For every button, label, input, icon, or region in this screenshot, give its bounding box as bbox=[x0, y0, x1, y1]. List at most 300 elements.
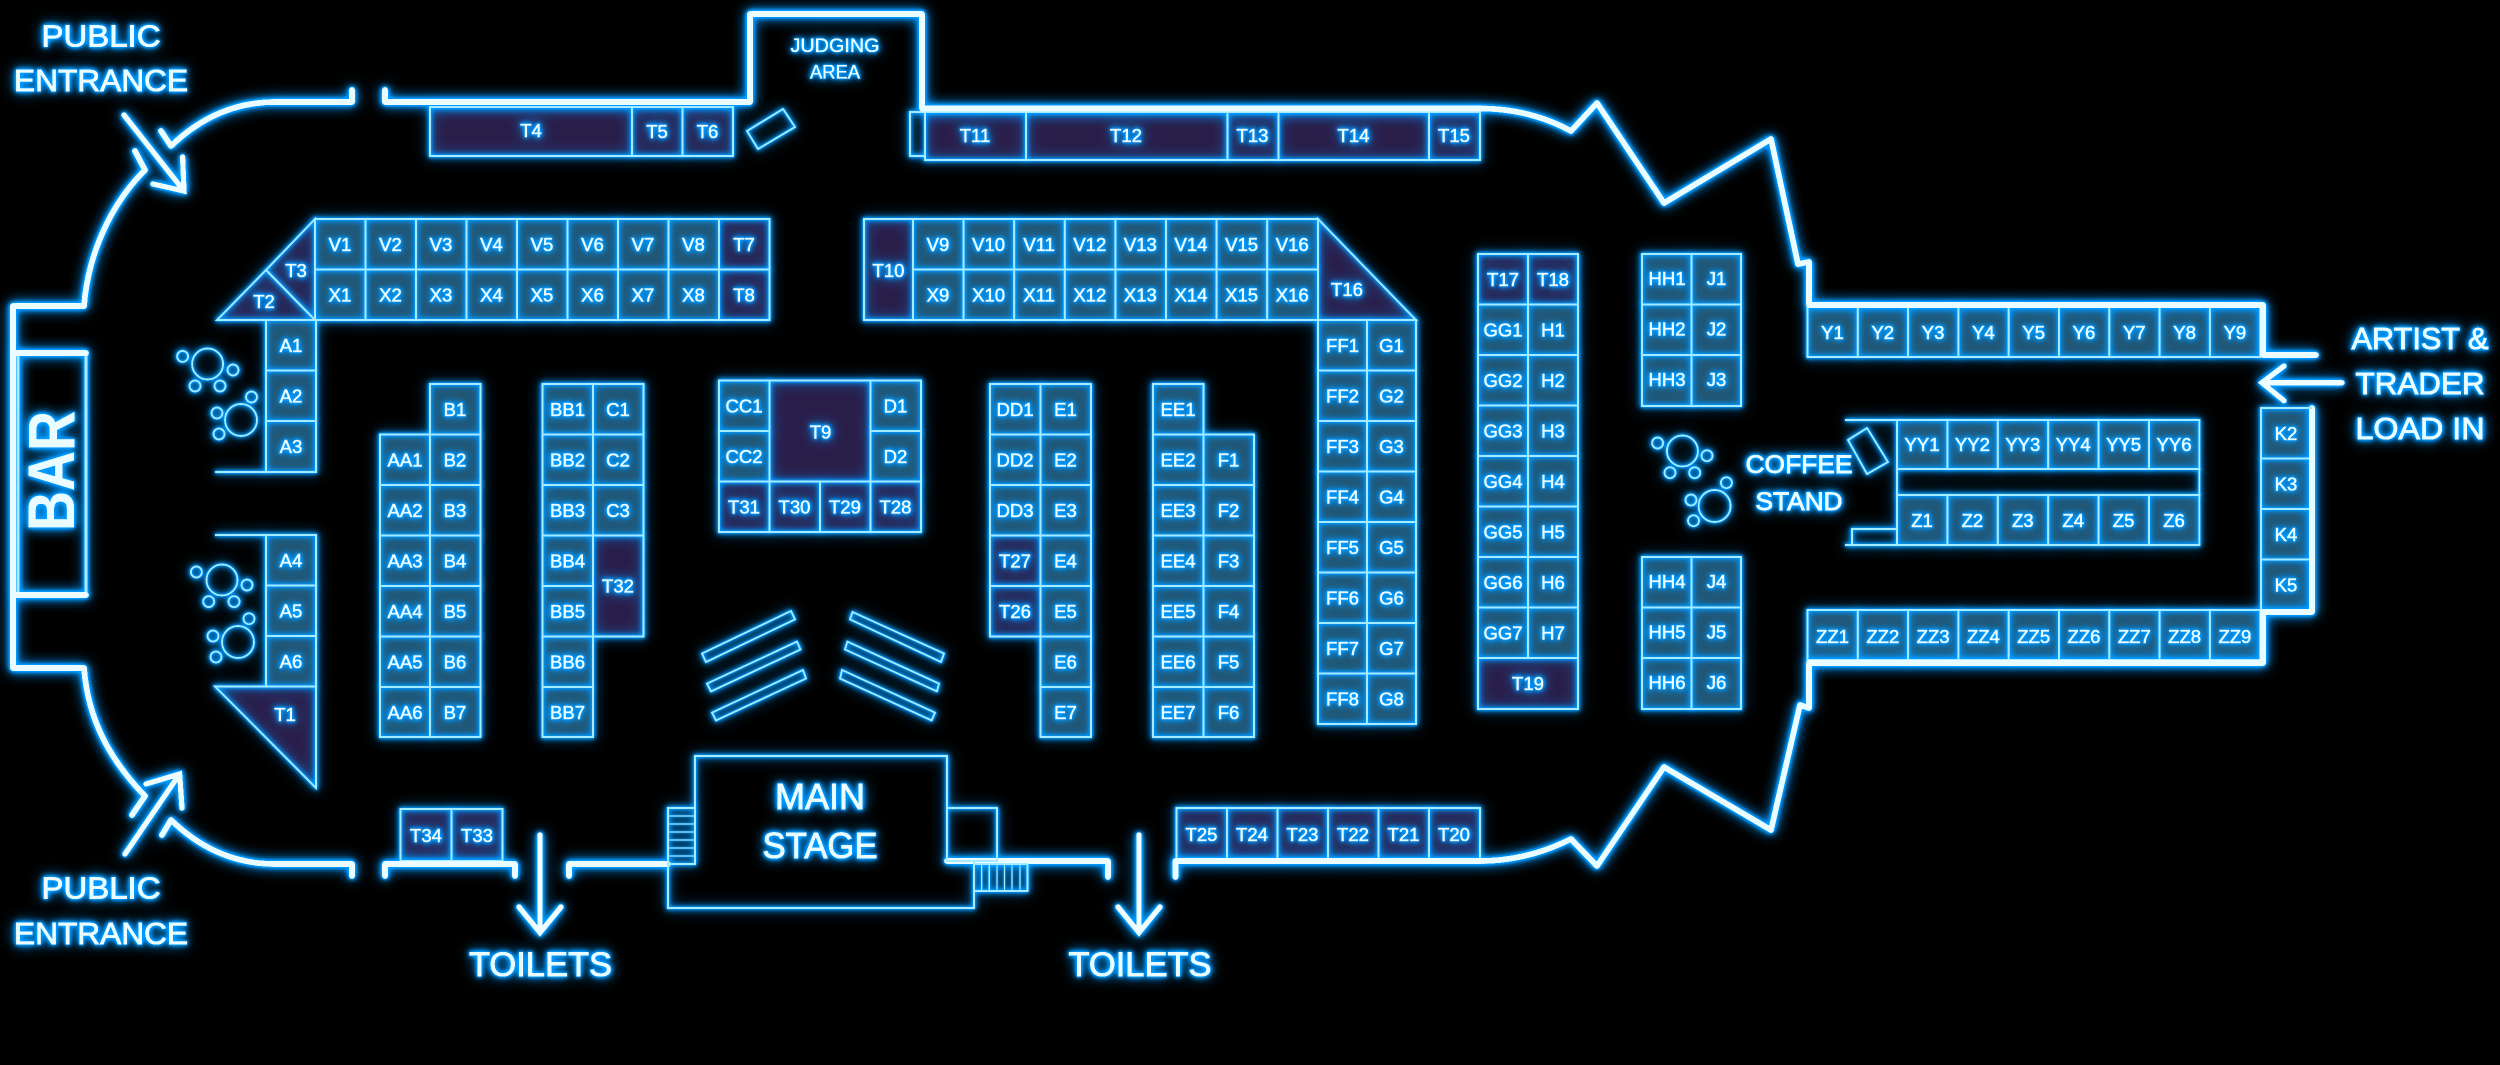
stall T30: T30 bbox=[779, 496, 810, 518]
stall CC1 bbox=[719, 380, 770, 431]
stall X1 bbox=[315, 270, 366, 320]
stall T10: T10 bbox=[873, 260, 904, 281]
stall X12: X12 bbox=[1073, 284, 1106, 306]
heading: coffee stand bbox=[1746, 451, 1852, 516]
stall X4: X4 bbox=[480, 284, 503, 306]
stall V1: V1 bbox=[329, 234, 351, 255]
stall K5: K5 bbox=[2275, 574, 2297, 596]
stall G2: G2 bbox=[1379, 386, 1404, 406]
stall X16 bbox=[1267, 270, 1318, 320]
stall E3 bbox=[1040, 485, 1091, 536]
stall BB4: BB4 bbox=[550, 550, 585, 572]
stall F1: F1 bbox=[1218, 450, 1239, 470]
stall B2 bbox=[430, 434, 480, 485]
stall T31 bbox=[719, 482, 770, 532]
stall E5 bbox=[1040, 586, 1091, 636]
stall EE4: EE4 bbox=[1161, 550, 1195, 572]
stall V7: V7 bbox=[632, 234, 654, 255]
stall F3: F3 bbox=[1218, 550, 1239, 572]
stall V11 bbox=[1014, 219, 1065, 270]
stall Z5: Z5 bbox=[2113, 510, 2134, 531]
stall T12 bbox=[1026, 112, 1228, 160]
stall Z1: Z1 bbox=[1911, 510, 1933, 531]
stall X15: X15 bbox=[1225, 284, 1258, 306]
stall T11 bbox=[925, 112, 1026, 160]
stall X14 bbox=[1166, 270, 1217, 320]
stall ZZ5 bbox=[2009, 610, 2059, 660]
stall J4: J4 bbox=[1707, 571, 1726, 592]
stall Z4: Z4 bbox=[2062, 510, 2084, 531]
stall HH5 bbox=[1642, 608, 1692, 658]
stall Y6: Y6 bbox=[2073, 322, 2095, 343]
stall V16 bbox=[1267, 219, 1318, 270]
stall T31: T31 bbox=[728, 496, 760, 518]
stall Y4 bbox=[1958, 307, 2009, 357]
stall HH1: HH1 bbox=[1648, 268, 1686, 289]
stall T22: T22 bbox=[1337, 824, 1369, 845]
stall X9: X9 bbox=[927, 284, 949, 306]
top wall stalls T4 to T6 bbox=[430, 107, 733, 156]
stall FF2 bbox=[1318, 370, 1367, 421]
stall H4 bbox=[1528, 456, 1578, 506]
blocks HH and J upper bbox=[1642, 254, 1741, 406]
bottom stalls T34 and T33 bbox=[400, 809, 502, 861]
stall V4: V4 bbox=[480, 234, 503, 255]
stall HH2: HH2 bbox=[1648, 318, 1686, 340]
bar top edge bbox=[13, 350, 86, 356]
stall T22 bbox=[1328, 808, 1378, 861]
stall T4 bbox=[430, 107, 632, 156]
stall AA3 bbox=[380, 536, 430, 586]
stall BB6 bbox=[542, 636, 593, 687]
stall YY4 bbox=[2048, 420, 2099, 469]
wall: north side from entrance to judging area bbox=[385, 14, 2316, 355]
heading: judging area: AREA bbox=[810, 62, 860, 84]
stall V9: V9 bbox=[927, 234, 949, 255]
stall EE3: EE3 bbox=[1161, 500, 1195, 521]
stall B2: B2 bbox=[444, 450, 466, 470]
stall T32: T32 bbox=[602, 576, 634, 596]
stall T2: T2 bbox=[253, 291, 275, 312]
blocks FF and G bbox=[1318, 320, 1416, 724]
stall T16: T16 bbox=[1331, 279, 1363, 300]
stall B7: B7 bbox=[444, 702, 466, 723]
stall A2: A2 bbox=[280, 386, 302, 406]
stall V15: V15 bbox=[1225, 234, 1258, 255]
stall D1 bbox=[870, 380, 921, 431]
stall AA6: AA6 bbox=[388, 702, 422, 723]
stall T7: T7 bbox=[733, 234, 755, 255]
block V and X left bbox=[217, 219, 770, 320]
stall FF4 bbox=[1318, 472, 1367, 522]
stall B4: B4 bbox=[444, 550, 466, 572]
bar label: BAR bbox=[14, 411, 88, 531]
stall X3: X3 bbox=[430, 284, 452, 306]
stall T28: T28 bbox=[880, 496, 911, 518]
stall T21: T21 bbox=[1388, 824, 1419, 845]
stall C2 bbox=[593, 434, 644, 485]
stall V8 bbox=[668, 219, 719, 270]
stall EE1 bbox=[1153, 384, 1204, 434]
stall A6: A6 bbox=[280, 651, 302, 672]
heading: coffee stand: COFFEE bbox=[1746, 451, 1852, 479]
heading: artist and trader load in: LOAD IN bbox=[2356, 411, 2484, 446]
stall YY5: YY5 bbox=[2106, 434, 2141, 455]
stall DD2: DD2 bbox=[996, 450, 1034, 470]
bar counter bbox=[18, 353, 86, 595]
stall J4 bbox=[1692, 557, 1741, 608]
seating icon 5 bbox=[1652, 436, 1712, 478]
stall H2 bbox=[1528, 355, 1578, 406]
stall A3 bbox=[266, 421, 316, 472]
stall FF7: FF7 bbox=[1326, 638, 1359, 659]
main stage label: MAIN bbox=[775, 776, 865, 817]
stall H3 bbox=[1528, 406, 1578, 456]
stall AA1: AA1 bbox=[388, 450, 422, 470]
stall X5 bbox=[517, 270, 568, 320]
stall G6: G6 bbox=[1379, 588, 1404, 608]
stall FF8 bbox=[1318, 674, 1367, 724]
stall F1 bbox=[1204, 434, 1254, 485]
stall X16: X16 bbox=[1276, 284, 1309, 306]
stall Y5 bbox=[2009, 307, 2059, 357]
stall BB5: BB5 bbox=[550, 601, 585, 622]
stall DD2 bbox=[990, 434, 1040, 485]
stall YY1 bbox=[1897, 420, 1947, 469]
stall ZZ4 bbox=[1958, 610, 2009, 660]
stall BB2: BB2 bbox=[550, 450, 585, 470]
stall T19: T19 bbox=[1512, 673, 1544, 694]
stall T6 bbox=[682, 107, 733, 156]
blocks GG and H bbox=[1478, 254, 1578, 709]
stall J2: J2 bbox=[1707, 318, 1726, 340]
stall GG3 bbox=[1478, 406, 1528, 456]
stall T19 bbox=[1478, 658, 1578, 709]
stall H6 bbox=[1528, 557, 1578, 608]
wall: south segment to stage bbox=[569, 864, 668, 876]
stall V15 bbox=[1217, 219, 1267, 270]
stall T13 bbox=[1228, 112, 1278, 160]
stall DD1: DD1 bbox=[996, 399, 1034, 420]
stall B3 bbox=[430, 485, 480, 536]
stall ZZ3 bbox=[1908, 610, 1958, 660]
stall FF3: FF3 bbox=[1326, 436, 1359, 457]
stall GG3: GG3 bbox=[1483, 420, 1523, 442]
stall V13: V13 bbox=[1124, 234, 1157, 255]
stall ZZ8 bbox=[2160, 610, 2210, 660]
stall HH5: HH5 bbox=[1648, 622, 1686, 642]
stall Y1: Y1 bbox=[1821, 322, 1844, 343]
wall: south segment after stage bbox=[947, 861, 1108, 877]
stall YY5 bbox=[2099, 420, 2149, 469]
stall FF4: FF4 bbox=[1326, 486, 1359, 508]
stall T20: T20 bbox=[1438, 824, 1470, 845]
stall BB3 bbox=[542, 485, 593, 536]
stall BB3: BB3 bbox=[550, 500, 585, 521]
stall V16: V16 bbox=[1276, 234, 1309, 255]
stall ZZ7 bbox=[2109, 610, 2160, 660]
stall T24 bbox=[1227, 808, 1278, 861]
stall GG2: GG2 bbox=[1483, 370, 1523, 391]
stall K4: K4 bbox=[2275, 524, 2297, 545]
stall J3 bbox=[1692, 355, 1741, 406]
stall H5 bbox=[1528, 506, 1578, 557]
judging area table icon bbox=[747, 109, 795, 149]
stall F4: F4 bbox=[1218, 601, 1239, 622]
stall Y6 bbox=[2059, 307, 2109, 357]
stall X9 bbox=[913, 270, 964, 320]
stall E7: E7 bbox=[1054, 702, 1077, 723]
stall X10 bbox=[964, 270, 1014, 320]
stall T27: T27 bbox=[999, 550, 1031, 572]
stall V13 bbox=[1115, 219, 1166, 270]
stall H4: H4 bbox=[1541, 471, 1565, 492]
stall T21 bbox=[1378, 808, 1429, 861]
arrow: left toilets bbox=[519, 835, 561, 933]
stall ZZ1: ZZ1 bbox=[1816, 626, 1849, 647]
stall EE2 bbox=[1153, 434, 1204, 485]
stall T18: T18 bbox=[1537, 269, 1569, 290]
stall E2: E2 bbox=[1054, 450, 1077, 470]
stall ZZ6 bbox=[2059, 610, 2109, 660]
stall T8 bbox=[719, 270, 770, 320]
stall T8: T8 bbox=[733, 284, 755, 306]
stall X15 bbox=[1217, 270, 1267, 320]
stage outer footprint bbox=[668, 808, 974, 908]
stall F2: F2 bbox=[1218, 500, 1239, 521]
stall C2: C2 bbox=[606, 450, 630, 470]
stall T17 bbox=[1478, 254, 1528, 304]
stall ZZ1 bbox=[1808, 610, 1858, 660]
stall BB1 bbox=[542, 384, 593, 434]
stall E2 bbox=[1040, 434, 1091, 485]
main stage label: STAGE bbox=[762, 825, 878, 866]
stall CC2: CC2 bbox=[725, 446, 763, 467]
stall A5 bbox=[266, 586, 316, 636]
stall C3 bbox=[593, 485, 644, 536]
stall E1 bbox=[1040, 384, 1091, 434]
wall: south east with loading bay bbox=[1176, 408, 2312, 877]
stall FF1 bbox=[1318, 320, 1367, 370]
seating icon 6 bbox=[1686, 477, 1732, 526]
stall T24: T24 bbox=[1236, 824, 1268, 845]
blocks BB and C bbox=[542, 384, 644, 737]
stall T10 bbox=[864, 219, 913, 320]
heading: top public entrance: PUBLIC bbox=[42, 18, 160, 54]
stall T29 bbox=[820, 482, 870, 532]
stall T26: T26 bbox=[999, 601, 1031, 622]
blocks AA and B bbox=[380, 384, 480, 737]
stall V12: V12 bbox=[1073, 234, 1106, 255]
stall X7: X7 bbox=[632, 284, 654, 306]
stall A5: A5 bbox=[280, 600, 302, 622]
ledge beside A4 bbox=[215, 534, 266, 536]
stall F2 bbox=[1204, 485, 1254, 536]
stall AA3: AA3 bbox=[388, 550, 422, 572]
wall: west side with bar bbox=[13, 151, 145, 815]
stall X2: X2 bbox=[379, 284, 402, 306]
stall A2 bbox=[266, 370, 316, 421]
stall X8: X8 bbox=[682, 284, 705, 306]
stall ZZ9: ZZ9 bbox=[2218, 626, 2251, 647]
stall AA6 bbox=[380, 687, 430, 737]
stall H6: H6 bbox=[1541, 572, 1565, 593]
bottom ledge bbox=[1845, 544, 1897, 546]
stall Z2: Z2 bbox=[1962, 510, 1983, 531]
heading: bottom public entrance bbox=[14, 870, 188, 951]
stall T11: T11 bbox=[960, 125, 990, 146]
heading: artist and trader load in: ARTIST & bbox=[2352, 321, 2489, 356]
bar bottom edge bbox=[13, 592, 86, 598]
stall T9 bbox=[770, 380, 870, 482]
stall X4 bbox=[466, 270, 517, 320]
bar area bbox=[13, 353, 88, 595]
stall Z2 bbox=[1947, 495, 1998, 545]
arrow: artist and trader load in bbox=[2262, 366, 2342, 401]
blocks EE and F bbox=[1153, 384, 1254, 737]
stall Z4 bbox=[2048, 495, 2099, 545]
stall B3: B3 bbox=[444, 500, 466, 521]
stall B1 bbox=[430, 384, 480, 434]
stall Z6: Z6 bbox=[2163, 510, 2185, 531]
stall J2 bbox=[1692, 304, 1741, 355]
centre gap bbox=[1897, 469, 2199, 495]
stall A1: A1 bbox=[280, 335, 302, 356]
stall Z5 bbox=[2099, 495, 2149, 545]
stall T20 bbox=[1429, 808, 1480, 861]
stall H1: H1 bbox=[1541, 320, 1565, 340]
stall HH3 bbox=[1642, 355, 1692, 406]
stall A4 bbox=[266, 535, 316, 586]
stall B7 bbox=[430, 687, 480, 737]
stall H7: H7 bbox=[1541, 622, 1565, 644]
stall T25: T25 bbox=[1186, 824, 1217, 845]
stall Y8 bbox=[2160, 307, 2210, 357]
stall T3: T3 bbox=[285, 260, 307, 281]
stall YY2 bbox=[1947, 420, 1998, 469]
wall: north west curve to entrance bbox=[161, 90, 352, 146]
seating icon 4 bbox=[208, 613, 254, 662]
heading: top public entrance: ENTRANCE bbox=[14, 63, 188, 98]
top wall stalls T11 to T15 bbox=[910, 112, 1480, 160]
stall T5 bbox=[632, 107, 682, 156]
stall G2 bbox=[1367, 370, 1416, 421]
stage main platform bbox=[695, 756, 947, 864]
stall T3 bbox=[266, 219, 315, 320]
stall FF8: FF8 bbox=[1326, 688, 1359, 710]
stall ZZ6: ZZ6 bbox=[2068, 626, 2100, 647]
stall G3 bbox=[1367, 421, 1416, 472]
wall: south west curve bbox=[162, 820, 352, 876]
stall X2 bbox=[366, 270, 416, 320]
stall Y9: Y9 bbox=[2224, 322, 2246, 343]
stall BB7 bbox=[542, 687, 593, 737]
stall V3: V3 bbox=[430, 234, 452, 255]
stall T34: T34 bbox=[410, 825, 442, 846]
stall CC1: CC1 bbox=[725, 396, 763, 416]
stall FF5 bbox=[1318, 522, 1367, 572]
stall ZZ4: ZZ4 bbox=[1967, 626, 2000, 647]
stall Z1 bbox=[1897, 495, 1947, 545]
stall GG4 bbox=[1478, 456, 1528, 506]
wall: south segment by T34 bbox=[385, 864, 515, 876]
stall Y7: Y7 bbox=[2123, 322, 2146, 343]
coffee stand counter icon bbox=[1848, 428, 1888, 474]
stall H2: H2 bbox=[1541, 370, 1565, 391]
stall FF3 bbox=[1318, 421, 1367, 472]
cupboard beside T11 bbox=[910, 112, 925, 156]
stall D1: D1 bbox=[884, 396, 907, 416]
stall B6: B6 bbox=[444, 652, 466, 672]
stall GG7: GG7 bbox=[1483, 622, 1523, 644]
stall GG1 bbox=[1478, 304, 1528, 355]
stall YY3 bbox=[1998, 420, 2048, 469]
heading: bottom public entrance: ENTRANCE bbox=[14, 916, 188, 951]
stall FF2: FF2 bbox=[1326, 386, 1359, 406]
stall V11: V11 bbox=[1023, 234, 1055, 255]
stall E4: E4 bbox=[1054, 550, 1077, 572]
stall G7 bbox=[1367, 623, 1416, 674]
stall D2 bbox=[870, 431, 921, 482]
stall B4 bbox=[430, 536, 480, 586]
stall X3 bbox=[416, 270, 466, 320]
stall A4: A4 bbox=[280, 550, 302, 571]
stall H3: H3 bbox=[1541, 420, 1565, 442]
stall V6: V6 bbox=[581, 234, 604, 255]
stall X12 bbox=[1065, 270, 1115, 320]
venue outer walls bbox=[13, 14, 2316, 877]
stall T23: T23 bbox=[1287, 824, 1318, 845]
arrow: right toilets bbox=[1118, 835, 1160, 933]
stall YY6: YY6 bbox=[2157, 434, 2191, 455]
stall X5: X5 bbox=[531, 284, 553, 306]
stall HH6 bbox=[1642, 658, 1692, 709]
stall G5 bbox=[1367, 522, 1416, 572]
stall T18 bbox=[1528, 254, 1578, 304]
stall K3 bbox=[2261, 458, 2312, 509]
stall DD1 bbox=[990, 384, 1040, 434]
heading: coffee stand: STAND bbox=[1756, 488, 1842, 516]
stall FF1: FF1 bbox=[1326, 335, 1359, 356]
stall V4 bbox=[466, 219, 517, 270]
stall D2: D2 bbox=[884, 446, 907, 467]
stall T33: T33 bbox=[461, 825, 493, 846]
stall HH3: HH3 bbox=[1648, 369, 1686, 390]
stall ZZ2 bbox=[1858, 610, 1908, 660]
stall Y8: Y8 bbox=[2173, 322, 2196, 343]
stall GG5 bbox=[1478, 506, 1528, 557]
stall K4 bbox=[2261, 509, 2312, 560]
stall ZZ2: ZZ2 bbox=[1866, 626, 1899, 647]
stall YY2: YY2 bbox=[1955, 434, 1990, 455]
stall X6 bbox=[568, 270, 618, 320]
stall V9 bbox=[913, 219, 964, 270]
stall G4 bbox=[1367, 472, 1416, 522]
stall CC2 bbox=[719, 431, 770, 482]
heading: bottom public entrance: PUBLIC bbox=[42, 870, 160, 906]
stall EE5 bbox=[1153, 586, 1204, 636]
stall T5: T5 bbox=[646, 121, 668, 142]
heading: judging area: JUDGING bbox=[790, 36, 880, 57]
stall V12 bbox=[1065, 219, 1115, 270]
stall J5: J5 bbox=[1707, 622, 1726, 642]
stall T9: T9 bbox=[810, 422, 831, 442]
stall T28 bbox=[870, 482, 921, 532]
stall T14 bbox=[1278, 112, 1429, 160]
stall B5 bbox=[430, 586, 480, 636]
stall BB5 bbox=[542, 586, 593, 636]
stall EE6 bbox=[1153, 636, 1204, 687]
